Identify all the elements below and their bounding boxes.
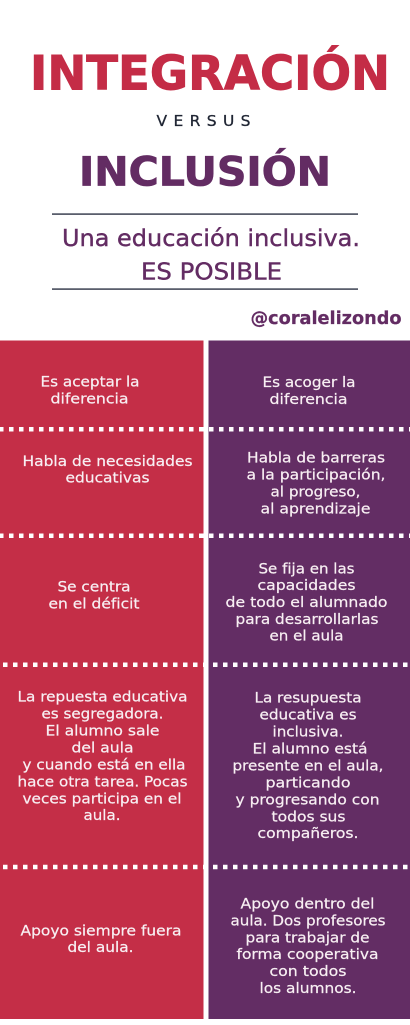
title: integración: INTEGRACIÓN bbox=[30, 46, 390, 101]
cell: integración row 5: Apoyo siempre fuera bbox=[20, 923, 182, 939]
tagline bbox=[62, 226, 360, 285]
cell: integración row 4: hace otra tarea. Pocas bbox=[18, 774, 188, 790]
cell: inclusión row 5: para trabajar de bbox=[246, 930, 370, 946]
cell: inclusión row 4: todos sus bbox=[272, 809, 346, 825]
cell: integración row 5 bbox=[20, 923, 182, 956]
top rule bbox=[52, 213, 358, 215]
cell: inclusión row 1: diferencia bbox=[270, 392, 348, 408]
author handle: @coralelizondo bbox=[250, 308, 402, 329]
cell: inclusión row 2: a la participación, bbox=[246, 467, 386, 483]
cell: inclusión row 2: al progreso, bbox=[270, 485, 360, 501]
cell: integración row 4: veces participa en el bbox=[22, 791, 182, 807]
cell: integración row 3: en el déficit bbox=[48, 596, 140, 612]
cell: integración row 3 bbox=[48, 579, 140, 612]
cell: inclusión row 2: al aprendizaje bbox=[260, 501, 371, 517]
cell: inclusión row 5: forma cooperativa bbox=[236, 947, 378, 963]
cell: inclusión row 1: Es acoger la bbox=[262, 375, 356, 391]
cell: inclusión row 3 bbox=[226, 561, 388, 645]
cell: inclusión row 5: con todos bbox=[270, 964, 346, 980]
cell: inclusión row 4: compañeros. bbox=[258, 826, 358, 842]
cell: integración row 4: y cuando está en ella bbox=[22, 758, 185, 774]
tagline: Una educación inclusiva. bbox=[62, 226, 360, 252]
cell: inclusión row 3: para desarrollarlas bbox=[236, 612, 378, 628]
cell: inclusión row 2 bbox=[246, 451, 386, 517]
dotted row dividers bbox=[0, 429, 410, 867]
cell: inclusión row 4 bbox=[232, 691, 384, 842]
cell: integración row 4: La repuesta educativa bbox=[18, 690, 188, 706]
subtitle: versus: VERSUS bbox=[156, 112, 250, 130]
cell: inclusión row 4: educativa es bbox=[260, 708, 356, 724]
cell: integración row 4: aula. bbox=[84, 808, 120, 824]
cell: inclusión row 4: y progresando con bbox=[236, 792, 380, 808]
cell: inclusión row 3: Se fija en las bbox=[258, 561, 354, 577]
cell: inclusión row 4: presente en el aula, bbox=[232, 758, 384, 774]
cell: inclusión row 2: Habla de barreras bbox=[247, 451, 385, 467]
cell: inclusión row 3: capacidades bbox=[258, 578, 356, 594]
cell: inclusión row 5: los alumnos. bbox=[260, 981, 356, 997]
cell: inclusión row 5: aula. Dos profesores bbox=[230, 914, 386, 930]
title: inclusión: INCLUSIÓN bbox=[79, 147, 331, 195]
tagline: ES POSIBLE bbox=[141, 259, 282, 285]
bottom rule bbox=[52, 288, 358, 290]
cell: inclusión row 5 bbox=[230, 897, 386, 997]
cell: inclusión row 4: inclusiva. bbox=[272, 725, 344, 741]
cell: integración row 3: Se centra bbox=[58, 579, 130, 595]
cell: inclusión row 1 bbox=[262, 375, 356, 408]
cell: integración row 4: del aula bbox=[72, 741, 134, 757]
cell: inclusión row 4: El alumno está bbox=[252, 742, 368, 758]
panel: inclusión column bbox=[208, 340, 410, 1019]
cell: integración row 2 bbox=[22, 454, 192, 487]
cell: integración row 1 bbox=[40, 375, 140, 408]
cell: integración row 4: es segregadora. bbox=[42, 707, 164, 723]
cell: inclusión row 4: La resupuesta bbox=[254, 691, 362, 707]
panel: integración column bbox=[0, 340, 204, 1019]
cell: integración row 4: El alumno sale bbox=[46, 724, 160, 740]
cell: inclusión row 3: en el aula bbox=[270, 629, 344, 645]
cell: inclusión row 4: particando bbox=[266, 776, 351, 792]
cell: integración row 1: diferencia bbox=[50, 392, 128, 408]
cell: integración row 5: del aula. bbox=[68, 940, 134, 956]
cell: inclusión row 5: Apoyo dentro del bbox=[240, 897, 374, 913]
cell: integración row 1: Es aceptar la bbox=[40, 375, 140, 391]
cell: integración row 4 bbox=[18, 690, 188, 824]
cell: integración row 2: Habla de necesidades bbox=[22, 454, 192, 470]
cell: integración row 2: educativas bbox=[66, 471, 150, 487]
cell: inclusión row 3: de todo el alumnado bbox=[226, 595, 388, 611]
